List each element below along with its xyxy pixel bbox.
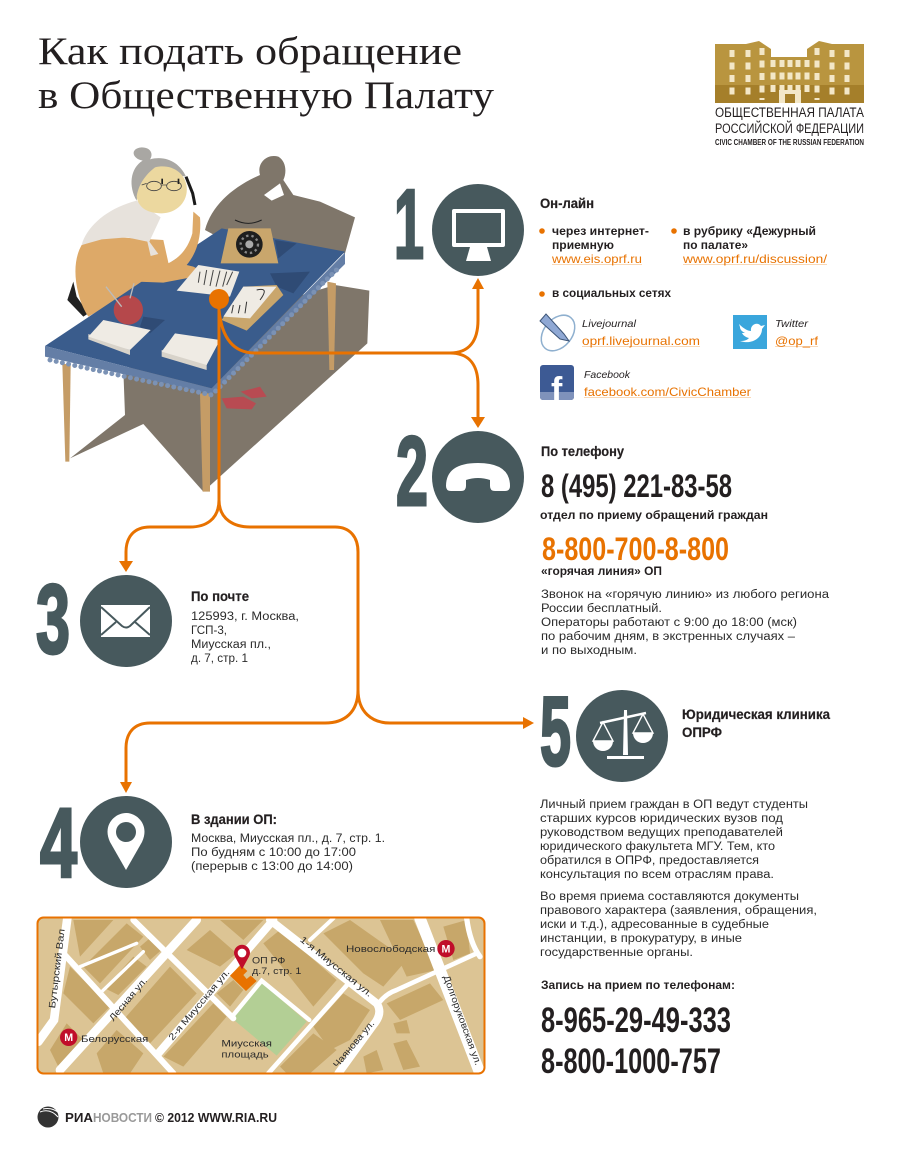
map labels: Чаянова ул. [331, 1019, 376, 1070]
hotline description: Звонок на «горячую линию» из любого региона [541, 589, 830, 601]
open book [222, 285, 283, 331]
slippers [222, 397, 256, 409]
icon: livejournal [534, 309, 582, 357]
paragraph 1: юридического факультета МГУ. Тем, кто [540, 841, 775, 853]
map labels: 1-я Миусская ул. [298, 934, 374, 999]
step 1: online [396, 184, 827, 400]
hotline caption: «горячая линия» ОП [541, 566, 662, 578]
metro Novoslobodskaya [437, 940, 455, 957]
logo: Civic Chamber: РОССИЙСКОЙ ФЕДЕРАЦИИ [715, 121, 864, 136]
heading: По телефону [541, 444, 624, 459]
table shadows [140, 240, 310, 333]
livejournal link: oprf.livejournal.com [582, 334, 700, 348]
metro Belorusskaya: М [64, 1032, 73, 1044]
twitter link: Twitter [775, 318, 809, 330]
heading: Он-лайн [540, 196, 594, 211]
table legs [62, 282, 336, 492]
text: duty officer section: www.oprf.ru/discussion/ [682, 252, 828, 266]
text: internet reception: приемную [552, 240, 614, 252]
facebook link [584, 369, 751, 399]
grandmother body [75, 237, 170, 317]
address: Миусская пл., [191, 639, 271, 651]
icon: monitor [432, 184, 524, 276]
heading: ОПРФ [682, 725, 722, 740]
shadow on the floor [70, 285, 369, 492]
numeral 4: 4 [40, 788, 77, 898]
hotline description [541, 589, 830, 657]
hotline number: 8-800-700-8-800 [542, 531, 729, 567]
handset [186, 177, 195, 205]
hotline description: по рабочим дням, в экстренных случаях – [541, 631, 796, 643]
map [37, 917, 485, 1074]
address and hours [191, 833, 385, 873]
address: д. 7, стр. 1 [191, 653, 248, 665]
bullets [539, 228, 677, 297]
square [232, 983, 307, 1056]
text: duty officer section: в рубрику «Дежурный [683, 226, 816, 238]
metro Belorusskaya [60, 1029, 77, 1046]
icon: envelope [80, 575, 172, 667]
text: internet reception [551, 226, 649, 266]
logo: Civic Chamber: ОБЩЕСТВЕННАЯ ПАЛАТА [715, 105, 864, 120]
icon: scales [576, 690, 668, 782]
caption: отдел по приему обращений граждан [540, 510, 768, 522]
title [38, 30, 495, 117]
text: internet reception: через интернет- [552, 226, 649, 238]
hotline description: и по выходным. [541, 645, 637, 657]
map labels: д.7, стр. 1 [252, 966, 301, 976]
map labels: Новослободская [346, 944, 435, 954]
icon: facebook: f [551, 371, 563, 409]
map labels: Лесная ул. [107, 976, 149, 1023]
step 3: mail [36, 564, 299, 674]
arrowheads [119, 278, 534, 793]
numeral 3: 3 [36, 564, 70, 674]
title: в Общественную Палату [38, 74, 495, 117]
numeral 1: 1 [394, 169, 424, 279]
step 4: in person [40, 788, 385, 898]
paragraph 1: руководством ведущих преподавателей [540, 827, 783, 839]
footer: RIA Novosti credit: НОВОСТИ [93, 1110, 152, 1125]
logo: Civic Chamber: CIVIC CHAMBER OF THE RUSSIAN FEDERATION [715, 138, 864, 147]
paragraph 2: Во время приема составляются документы [540, 891, 799, 903]
papers [177, 265, 239, 297]
map labels: Миусская [221, 1039, 272, 1049]
shadow on the wall [205, 156, 355, 253]
numeral 2: 2 [396, 416, 428, 526]
address and hours: (перерыв с 13:00 до 14:00) [191, 861, 353, 873]
logo: Civic Chamber [715, 41, 864, 147]
heading: Юридическая клиника [682, 707, 830, 722]
building [230, 965, 257, 991]
yarn ball [106, 283, 143, 325]
address and hours: По будням с 10:00 до 17:00 [191, 847, 356, 859]
eyes [161, 179, 179, 184]
text: duty officer section [682, 226, 828, 266]
hair [132, 147, 186, 201]
address [191, 611, 299, 665]
heading: В здании ОП: [191, 812, 277, 827]
footer: RIA Novosti credit: РИА [65, 1110, 94, 1125]
map pin [234, 945, 250, 969]
icon: facebook [540, 365, 574, 400]
footer: RIA Novosti credit: © 2012 WWW.RIA.RU [155, 1110, 277, 1125]
footer: RIA Novosti credit [38, 1106, 277, 1128]
map labels: площадь [221, 1049, 269, 1059]
text: duty officer section: по палате» [683, 240, 748, 252]
illustration: grandmother at the table [45, 147, 369, 492]
livejournal link [582, 318, 700, 348]
phone number: 8 (495) 221-83-58 [541, 468, 732, 504]
appointment numbers [541, 1001, 731, 1081]
step 5: legal clinic [540, 676, 830, 1081]
telephone [221, 220, 278, 263]
map labels: ОП РФ [252, 955, 285, 965]
icon: twitter [733, 315, 767, 349]
connector lines [126, 288, 525, 785]
address and hours: Москва, Миусская пл., д. 7, стр. 1. [191, 833, 385, 845]
facebook link: Facebook [584, 369, 631, 381]
paragraph 1: обратился в ОПРФ, предоставляется [540, 855, 759, 867]
text: internet reception: www.eis.oprf.ru [551, 252, 642, 266]
paragraph 2: правового характера (заявления, обращения, [540, 905, 817, 917]
map labels [47, 928, 483, 1070]
paragraph 2: иски и т.д.), адресованные в судебные [540, 919, 769, 931]
facebook link: facebook.com/CivicChamber [584, 385, 751, 399]
twitter link: @op_rf [775, 334, 819, 348]
appointment numbers: 8-800-1000-757 [541, 1042, 721, 1081]
arm [137, 212, 200, 283]
metro Novoslobodskaya: М [442, 943, 451, 955]
table cloth [45, 228, 345, 395]
paper stack left [88, 320, 151, 355]
paper stack right [162, 333, 220, 370]
paragraph 1: консультация по всем отраслям права. [540, 869, 774, 881]
paragraph 1: Личный прием граждан в ОП ведут студенты [540, 799, 808, 811]
livejournal link: Livejournal [582, 318, 637, 330]
appointment numbers: 8-965-29-49-333 [541, 1001, 731, 1040]
hotline description: Операторы работают с 9:00 до 18:00 (мск) [541, 617, 797, 629]
step 2: phone [396, 416, 830, 657]
map labels: Долгоруковская ул. [441, 974, 483, 1067]
paragraph 2: государственные органы. [540, 947, 693, 959]
hotline description: России бесплатный. [541, 603, 662, 615]
appointment label: Запись на прием по телефонам: [541, 980, 735, 992]
icon: location pin [80, 796, 172, 888]
heading: По почте [191, 589, 249, 604]
text: social networks: в социальных сетях [552, 288, 672, 300]
address: ГСП-3, [191, 625, 227, 637]
heading [682, 707, 830, 740]
address: 125993, г. Москва, [191, 611, 299, 623]
paragraph 2 [540, 891, 817, 959]
glasses [142, 181, 181, 191]
map labels: Белорусская [81, 1034, 148, 1044]
paragraph 1 [540, 799, 808, 881]
numeral 5: 5 [540, 676, 571, 786]
map labels: Бутырский Вал [47, 928, 67, 1009]
icon: handset [432, 431, 524, 523]
map labels: 2-я Миусская ул. [167, 967, 232, 1042]
start dot [209, 289, 229, 309]
title: Как подать обращение [38, 30, 462, 73]
twitter link [775, 318, 819, 348]
paragraph 1: старших курсов юридических вузов под [540, 813, 783, 825]
shawl [82, 201, 161, 256]
face [137, 166, 187, 213]
paragraph 2: инстанции, в прокуратуру, в иные [540, 933, 742, 945]
chair [67, 282, 88, 317]
